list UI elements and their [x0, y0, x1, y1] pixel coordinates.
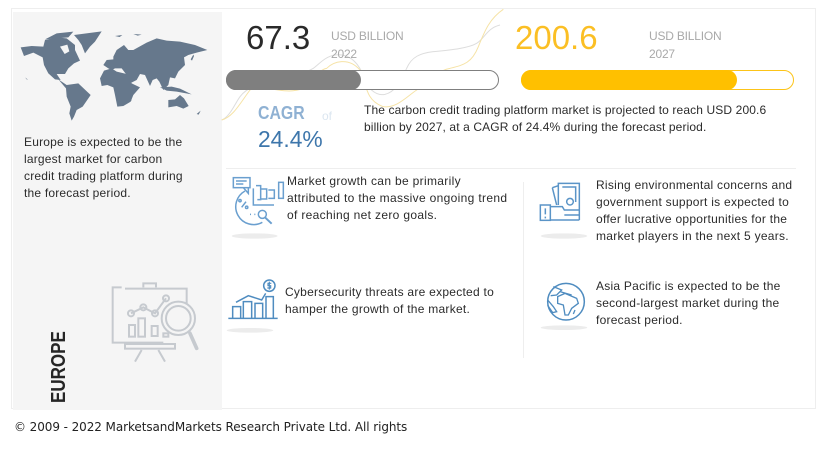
label: USD billion 2027	[649, 29, 722, 61]
stat: 2027 value: 200.6	[515, 19, 598, 56]
label: USD billion 2022: USD BILLION	[331, 29, 404, 43]
vertical divider	[523, 182, 524, 358]
text: Europe summary: credit trading platform during	[24, 169, 183, 183]
world map	[20, 31, 208, 120]
text: cybersecurity: hamper the growth of the market.	[285, 302, 470, 316]
icon: globe	[541, 282, 587, 330]
label: USD billion 2022: 2022	[331, 47, 357, 61]
text: market growth: of reaching net zero goals.	[287, 208, 437, 222]
text: Asia Pacific: second-largest market during the	[596, 296, 779, 310]
text: market growth: attributed to the massive ongoing trend	[287, 191, 507, 205]
text: environmental concerns: market players in the next 5 years.	[596, 229, 789, 243]
text: environmental concerns: Rising environmental concerns and	[596, 178, 792, 192]
copyright footer: © 2009 - 2022 MarketsandMarkets Research Private Ltd. All rights	[14, 420, 407, 434]
icon: presentation chart	[112, 282, 198, 362]
summary text: The carbon credit trading platform market is projected to reach USD 200.6	[364, 103, 766, 117]
region label: Europe: EUROPE	[48, 331, 70, 403]
text: cybersecurity	[285, 285, 494, 316]
panel: Europe sidebar	[13, 12, 222, 410]
text: Europe summary: the forecast period.	[24, 186, 131, 200]
text: Asia Pacific	[596, 279, 781, 327]
icon: cybersecurity growth chart	[227, 279, 278, 332]
text: environmental concerns: offer lucrative opportunities for the	[596, 212, 787, 226]
divider	[226, 168, 796, 169]
text: Europe summary	[24, 135, 183, 200]
label: USD billion 2022	[331, 29, 404, 61]
label: USD billion 2027: 2027	[649, 47, 675, 61]
text: market growth: Market growth can be primarily	[287, 174, 461, 188]
text: environmental concerns: government support is expected to	[596, 195, 789, 209]
stat: 2022 value: 67.3	[246, 19, 310, 56]
of label: of	[322, 109, 332, 123]
CAGR value: 24.4%	[258, 126, 323, 152]
decorative curves	[222, 9, 504, 120]
text: environmental concerns	[596, 178, 792, 243]
summary text: billion by 2027, at a CAGR of 24.4% during the forecast period.	[364, 120, 706, 134]
text: Europe summary: largest market for carbon	[24, 152, 162, 166]
text: Europe summary: Europe is expected to be the	[24, 135, 182, 149]
text: cybersecurity: Cybersecurity threats are expected to	[285, 285, 494, 299]
label: USD billion 2027: USD BILLION	[649, 29, 722, 43]
summary text	[364, 103, 766, 134]
CAGR label: CAGR	[258, 103, 305, 123]
text: Asia Pacific: Asia Pacific is expected to be the	[596, 279, 781, 293]
icon: market growth chart	[232, 176, 284, 238]
text: Asia Pacific: forecast period.	[596, 313, 683, 327]
progress bar: 2022	[226, 70, 499, 90]
icon: money in hand	[540, 182, 587, 238]
progress bar: 2027	[521, 70, 794, 90]
text: market growth	[287, 174, 507, 222]
